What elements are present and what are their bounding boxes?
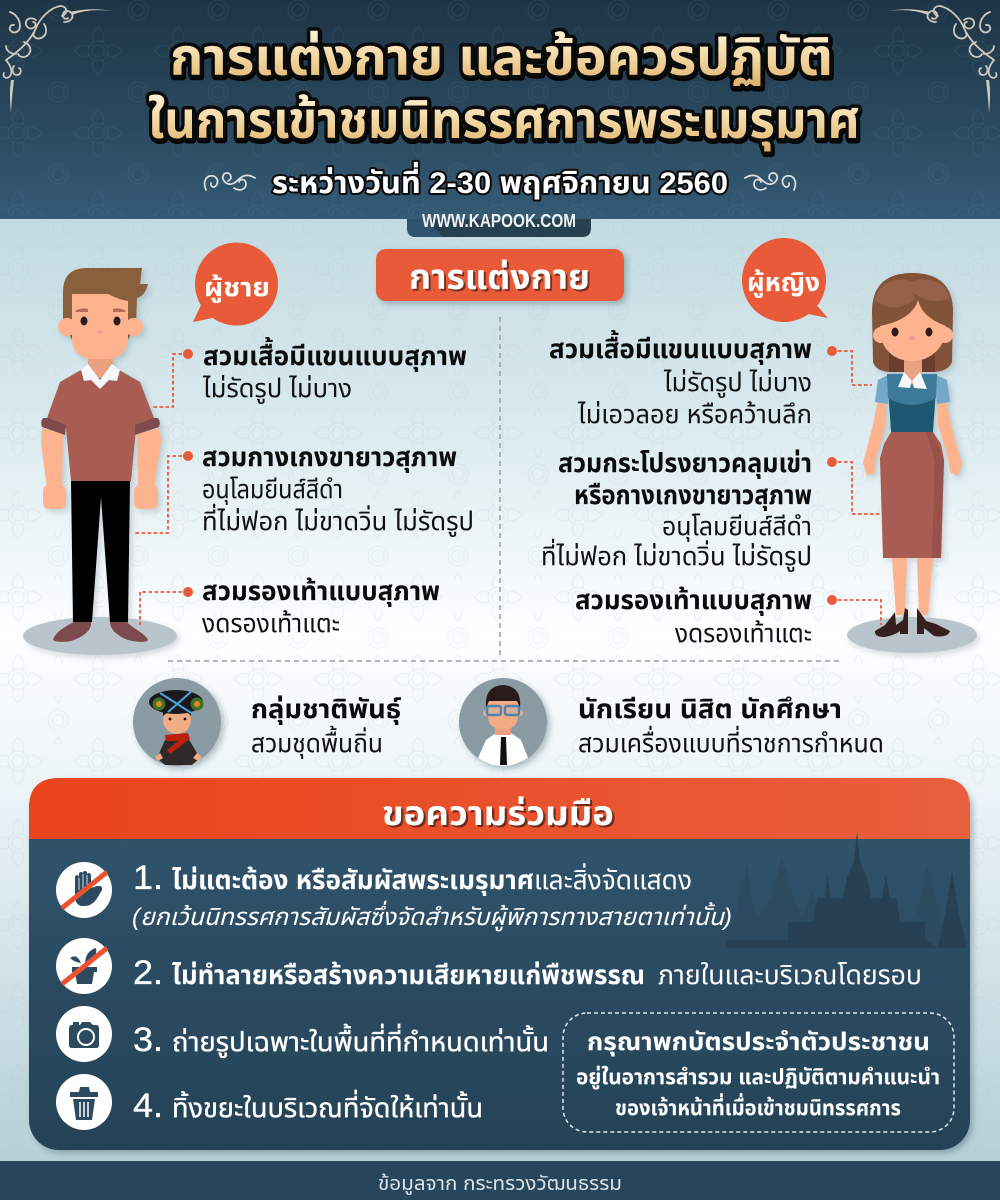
page background	[0, 219, 1000, 1161]
text: women's dress code: หรือกางเกงขายาวสุภาพ	[574, 480, 812, 511]
text: women's dress code: สวมกระโปรงยาวคลุมเข่า	[558, 448, 812, 479]
callout: ID card reminder: อยู่ในอาการสำรวม และปฏิบัติตามคำแนะนำ	[576, 1066, 940, 1090]
text: men's dress code: ไม่รัดรูป ไม่บาง	[202, 373, 352, 404]
list item 2: ไม่ทำลายหรือสร้างความเสียหายแก่พืชพรรณ	[172, 960, 645, 990]
list item 1: และสิ่งจัดแสดง	[534, 863, 692, 895]
list item 1: (ยกเว้นนิทรรศการสัมผัสซึ่งจัดสำหรับผู้พิการทางสายตาเท่านั้น)	[132, 900, 732, 932]
heading banner: การแต่งกาย: การแต่งกาย	[409, 258, 590, 297]
callout: ID card reminder: ของเจ้าหน้าที่เมื่อเข้าชมนิทรรศการ	[615, 1093, 901, 1120]
text: ethnic groups	[251, 694, 401, 759]
callout connectors: man	[134, 349, 193, 625]
text: women's dress code: สวมเสื้อมีแขนแบบสุภาพ	[549, 330, 812, 365]
icon: student	[459, 678, 547, 766]
speech bubble: woman	[742, 238, 828, 322]
text: women's dress code: ไม่รัดรูป ไม่บาง	[663, 367, 812, 398]
text: women's dress code: งดรองเท้าแตะ	[675, 618, 812, 648]
heading banner: การแต่งกาย	[376, 249, 624, 301]
text: students: สวมเครื่องแบบที่ราชการกำหนด	[578, 725, 884, 758]
list item 4	[56, 1074, 483, 1130]
text: women's dress code: อนุโลมยีนส์สีดำ	[662, 511, 812, 542]
text: ethnic groups: สวมชุดพื้นถิ่น	[251, 725, 383, 759]
callout: ID card reminder	[563, 1013, 954, 1132]
text: ethnic groups: กลุ่มชาติพันธุ์	[251, 694, 401, 725]
text: men's dress code: อนุโลมยีนส์สีดำ	[202, 474, 343, 505]
text: men's dress code	[202, 337, 474, 638]
text: men's dress code: สวมกางเกงขายาวสุภาพ	[202, 442, 457, 473]
speech bubble: man	[193, 242, 278, 326]
panel: cooperation	[29, 778, 970, 1150]
centre divider	[168, 317, 843, 661]
list item 4: 4.	[133, 1087, 163, 1125]
list item 2	[56, 938, 922, 994]
list item 3: 3.	[133, 1021, 163, 1059]
panel heading: ขอความร่วมมือ	[382, 795, 614, 833]
temple silhouette	[704, 832, 967, 948]
footer: ข้อมูลจาก กระทรวงวัฒนธรรม	[378, 1172, 622, 1196]
list item 3	[56, 1006, 549, 1062]
text: men's dress code: สวมเสื้อมีแขนแบบสุภาพ	[203, 337, 467, 372]
website tab: WWW.KAPOOK.COM	[422, 211, 576, 231]
date subtitle: ระหว่างวันที่ 2-30 พฤศจิกายน 2560	[272, 161, 728, 200]
ornament: top right corner	[887, 6, 996, 113]
callout connectors: woman	[827, 346, 881, 625]
icon: ethnic group person	[133, 678, 221, 766]
text: women's dress code: ไม่เอวลอย หรือคว้านลึก	[577, 399, 812, 429]
figure: man	[23, 268, 177, 655]
speech bubble: man: ผู้ชาย	[204, 272, 270, 303]
list item 1: 1.	[133, 859, 163, 897]
text: men's dress code: ที่ไม่ฟอก ไม่ขาดวิ่น ไม่รัดรูป	[202, 503, 474, 537]
website tab	[407, 211, 591, 237]
text: women's dress code: ที่ไม่ฟอก ไม่ขาดวิ่น ไม่รัดรูป	[541, 538, 812, 572]
date subtitle	[205, 161, 795, 200]
list item 1	[56, 859, 732, 932]
text: men's dress code: สวมรองเท้าแบบสุภาพ	[202, 576, 440, 607]
text: students: นักเรียน นิสิต นักศึกษา	[578, 694, 842, 724]
list item 1: ไม่แตะต้อง หรือสัมผัสพระเมรุมาศ	[172, 865, 534, 896]
footer	[0, 1161, 1000, 1200]
text: women's dress code	[541, 330, 812, 648]
header band	[0, 0, 1000, 219]
figure: woman	[847, 273, 977, 653]
callout: ID card reminder: กรุณาพกบัตรประจำตัวประชาชน	[587, 1028, 930, 1057]
speech bubble: woman: ผู้หญิง	[747, 267, 820, 298]
title: การแต่งกาย และข้อควรปฏิบัติ	[170, 29, 833, 87]
list item 3: ถ่ายรูปเฉพาะในพื้นที่ที่กำหนดเท่านั้น	[172, 1023, 549, 1058]
title	[148, 29, 860, 151]
ornament: top left corner	[4, 6, 113, 113]
text: women's dress code: สวมรองเท้าแบบสุภาพ	[575, 585, 812, 616]
text: students	[578, 694, 884, 758]
text: men's dress code: งดรองเท้าแตะ	[202, 608, 340, 638]
list item 2: 2.	[133, 954, 163, 992]
list item 4: ทิ้งขยะในบริเวณที่จัดให้เท่านั้น	[172, 1089, 483, 1123]
list item 2: ภายในและบริเวณโดยรอบ	[658, 960, 922, 990]
title: ในการเข้าชมนิทรรศการพระเมรุมาศ	[148, 92, 860, 151]
